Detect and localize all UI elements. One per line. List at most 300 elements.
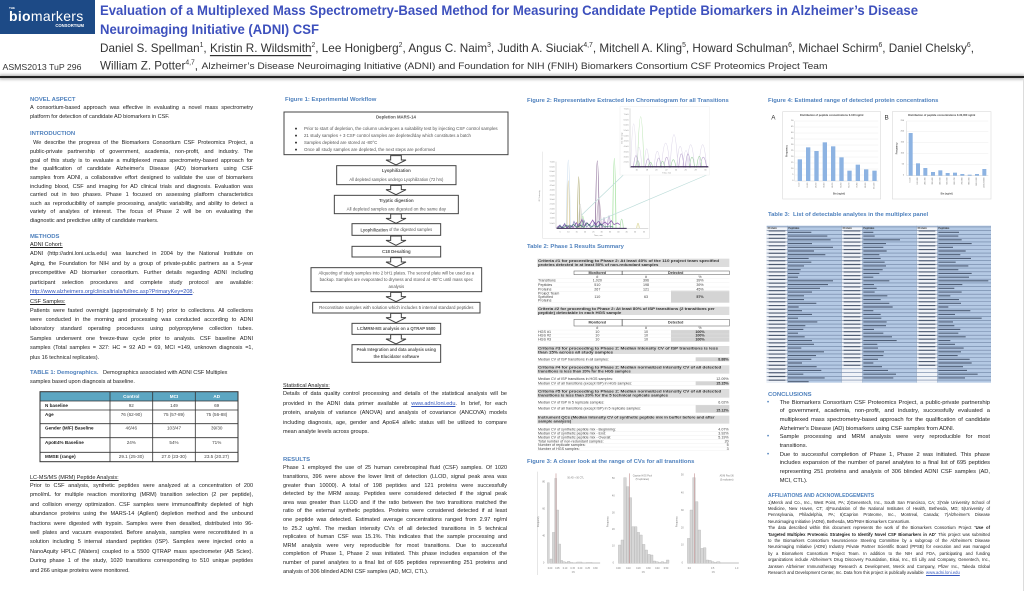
- table 2: phase 1 results summary: %: [698, 275, 702, 279]
- text: LC-MS/MS peptide analysis: [30, 483, 254, 574]
- text: results: ratio of the external synthetic peptides. Proteins were considered detected if at least: [283, 508, 507, 514]
- step: reconstitute: Reconstitute samples with solution which includes 5 internal standard peptides: [319, 305, 474, 310]
- chart B: 250: [901, 120, 905, 122]
- chart B: 600-700: [954, 176, 956, 185]
- text: LC-MS/MS peptide analysis: abundance proteins using the MARS-14 (Agilent) depletion method and the unbound: [30, 511, 253, 517]
- arrow 6: [386, 292, 406, 302]
- text: CSF samples: Samples underwent one freeze-thaw cycle prior to analysis. CSF baseline ADNI: [30, 336, 253, 342]
- arrow 4: [386, 236, 406, 245]
- table 2: phase 1 results summary: Median CV of all transitions (except ISP) in 5 replicate samples:: [538, 407, 641, 411]
- histogram: 50 AD + 50 CTL: 80: [542, 481, 546, 483]
- table 1: demographics: MMSE (range): [45, 454, 76, 459]
- table 2: phase 1 results summary: 10: [644, 338, 648, 342]
- table 1: demographics: Age: [45, 412, 54, 417]
- table 1: demographics: 103/47: [167, 426, 181, 430]
- table 2: phase 1 results summary: Monitored: [588, 321, 606, 325]
- table 2: phase 1 results summary: Criteria #2 for proceeding to Phase 2: At least 80% of ISP transitions (2 transitions per: [538, 307, 715, 311]
- inset chromatogram: 6.5e5: [624, 119, 630, 121]
- text: affiliations and acknowledgements: organizations include Alzheimer's Drug Discovery Foundation, Eisai, Inc., Eli Lilly and Company, Genentech, Inc.,: [768, 557, 990, 562]
- text: results: number of panel analytes to a final list of 695 peptides representing 251 proteins and: [283, 560, 507, 566]
- main chromatogram: Time, min: [594, 235, 603, 237]
- histogram: 50 AD + 50 CTL: 0.15: [570, 568, 576, 570]
- table 2: phase 1 results summary: sample analysis): [538, 420, 572, 424]
- chart B: 100-200: [917, 176, 919, 185]
- table 2: phase 1 results summary: Detected: [668, 321, 683, 325]
- title: [100, 3, 918, 38]
- chart B: 50: [902, 164, 905, 166]
- table 2: phase 1 results summary: Median CV of ISP transitions in HGS samples:: [538, 377, 613, 381]
- table 2: phase 1 results summary: #: [645, 275, 648, 279]
- step: depletion: Samples depleted are stored at -80°C: [304, 140, 377, 145]
- step: depletion: Prior to start of depletion, the column undergoes a suitability test by injecting CSF control samples: [304, 126, 498, 131]
- chart A: 0: [792, 180, 794, 182]
- table 1: demographics: 39/30: [211, 426, 223, 430]
- text: CSF samples: plus 16 technical replicates).: [30, 355, 99, 361]
- chart B: 150: [901, 142, 905, 144]
- main chromatogram: 6.5e6: [550, 166, 556, 168]
- text: results: analysis of 306 blinded ADNI CSF samples (AD, MCI, CTL).: [283, 569, 428, 575]
- logo: biomarkers consortium: CONSORTIUM: [55, 22, 84, 28]
- authors: ,: [203, 41, 210, 55]
- chart A: 45: [791, 126, 794, 128]
- authors: ,: [971, 41, 974, 55]
- figure 2: extracted ion chromatogram: [538, 106, 710, 238]
- text: statistical analysis: Details of data quality control processing and details of the statistical analysis will be: [283, 391, 507, 397]
- text: LC-MS/MS peptide analysis: pmol/mL for multiple reaction monitoring (MRM) transition selection (2 per peptide),: [30, 492, 253, 498]
- step: lyophilization: [337, 166, 456, 185]
- table 3: detectable analytes: Peptides: [788, 226, 800, 230]
- chart A: 5: [792, 174, 794, 176]
- step: aliquoting: analysis: [389, 284, 404, 289]
- authors: 5: [682, 42, 686, 48]
- text: novel aspect: platform for detection of candidate AD biomarkers in CSF.: [30, 114, 170, 120]
- chart B: 800-900: [969, 176, 971, 185]
- authors: 1: [200, 42, 204, 48]
- text: LC-MS/MS peptide analysis: Prior to CSF analysis, synthetic peptides were analyzed at a concentration of 200: [30, 483, 253, 489]
- heading: results: RESULTS: [283, 457, 310, 463]
- logo: biomarkers consortium: biomarkers: [9, 8, 84, 24]
- table 2: phase 1 results summary: Transitions: [538, 279, 556, 283]
- text: conclusions: transitions.: [780, 443, 807, 449]
- table 2: phase 1 results summary: #: [596, 275, 599, 279]
- chart A: 40: [791, 132, 794, 134]
- inset chromatogram: 5.0e5: [624, 135, 630, 137]
- heading: novel aspect: NOVEL ASPECT: [30, 97, 76, 103]
- step: aliquoting: backup. Samples are evaporated to dryness and stored at -80°C until mass spec: [320, 277, 474, 282]
- table 1: demographics: 29.1 (25-30): [119, 454, 144, 459]
- chart B: 100: [901, 153, 905, 155]
- label B: B: [885, 114, 889, 122]
- text: ADNI cohort: http://www.alzheimers.org/clinicaltrials/fullrec.asp?PrimaryKey=208.: [30, 289, 194, 295]
- main chromatogram: 35: [609, 232, 612, 234]
- table 2: phase 1 results summary: Criteria #3 for proceeding to Phase 2: Median Intensity CV of ISP transitions is less: [538, 346, 718, 350]
- header rule: [0, 76, 1024, 78]
- chart B: Frequency: [897, 142, 899, 154]
- table 2: phase 1 results summary: transitions is less than 20% for the HGS samples: [538, 370, 631, 374]
- heading: table 3: Table 3: List of detectable analytes in the multiplex panel: [768, 212, 928, 218]
- table 1: demographics: 54%: [169, 440, 179, 445]
- text: introduction: carried out in two phases. Phase 1 focused on assessing platform characteristics: [30, 192, 253, 198]
- text: statistical analysis: including diagnosis, age, gender and ApoE4 allelic status will be utilized to compare: [283, 420, 507, 426]
- heading: introduction: INTRODUCTION: [30, 131, 75, 137]
- text: introduction: [30, 140, 254, 224]
- text: LC-MS/MS peptide analysis: and 266 unique proteins were monitored.: [30, 568, 130, 574]
- inset chromatogram: 4.0e5: [624, 146, 630, 148]
- text: ADNI cohort: [30, 251, 253, 295]
- table 1: demographics: 23.5 (20.27): [204, 454, 230, 459]
- table 2: phase 1 results summary: peptide) detectable in each HGS sample: [538, 311, 621, 315]
- authors: 4,7: [583, 42, 593, 48]
- authors: 6: [967, 42, 971, 48]
- chart A: 0-10: [799, 182, 801, 187]
- chart B: 400-500: [939, 176, 941, 185]
- text: results: area was greater than LLOD and if the ratio between the two transitions matched the: [283, 500, 507, 506]
- bullets: conclusions: •: [767, 434, 769, 440]
- step: tryptic digestion: [334, 195, 458, 214]
- table 2: phase 1 results summary: 121: [643, 287, 649, 291]
- subheading: CSF samples: CSF Samples:: [30, 299, 65, 305]
- table 2: phase 1 results summary: 100%: [695, 334, 705, 338]
- table 2: phase 1 results summary: Number of HGS samples:: [538, 447, 580, 451]
- text: novel aspect: [30, 105, 253, 120]
- histogram: 50 AD + 50 CTL: 40: [542, 536, 546, 538]
- bullets: conclusions: •: [767, 452, 769, 458]
- text: LC-MS/MS peptide analysis: solution including 5 internal standard peptides (ISP). Samples were injected onto a: [30, 539, 253, 545]
- table 2: phase 1 results summary: Criteria #4 for proceeding to Phase 2: Median normalized intensity CV of all detected: [538, 365, 721, 369]
- chart A: 50-60: [840, 182, 842, 188]
- histogram: ADNI pool: 30: [681, 510, 684, 512]
- histogram: Caprion HGS pool: Frequency: [606, 515, 609, 527]
- histogram: ADNI pool: 10: [681, 545, 684, 547]
- text: results: detected by the MRM assay. Peptides were considered detected if the signal peak: [283, 491, 507, 497]
- chart A: 20: [791, 156, 794, 158]
- main chromatogram: 5: [559, 232, 561, 234]
- text: results: [283, 465, 507, 575]
- inset chromatogram: 6.0e5: [624, 125, 630, 127]
- table 2: phase 1 results summary: Monitored: [588, 271, 606, 275]
- bullets: conclusions: [767, 400, 769, 458]
- table 2: phase 1 results summary: Total number of non-redundant samples:: [538, 439, 604, 443]
- authors: [100, 41, 974, 72]
- table 2: phase 1 results summary: Median CV of synthetic peptide mix - Overall:: [538, 435, 611, 439]
- histogram: ADNI pool: [675, 473, 739, 574]
- chart B: 0-100: [910, 176, 912, 182]
- main chromatogram: 1.0e6: [550, 218, 556, 220]
- main chromatogram: 20: [584, 232, 587, 234]
- authors: ,: [195, 58, 198, 72]
- text: introduction: public-private partnership of government, academia, non-profit, and industry. The: [30, 149, 253, 155]
- caption: table 1: [30, 370, 228, 385]
- subheading: ADNI cohort: ADNI Cohort:: [30, 242, 63, 248]
- histogram: 50 AD + 50 CTL: 60: [542, 508, 546, 510]
- chart A: 15: [791, 162, 794, 164]
- caption: table 1: samples based upon diagnosis at baseline.: [30, 379, 135, 385]
- authors: , Angus C. Naim: [402, 41, 487, 55]
- table 2: phase 1 results summary: Peptides: [538, 283, 552, 287]
- label A: A: [771, 114, 776, 122]
- table 1: demographics: 75 (56-88): [206, 412, 228, 417]
- step: reconstitute: [313, 302, 480, 313]
- text: statistical analysis: protein, analysis of variance (ANOVA) and analysis of covariance (ANCOVA) models: [283, 410, 507, 416]
- authors: 3: [487, 42, 491, 48]
- text: conclusions: representing 251 proteins and analysis of 306 blinded ADNI CSF samples (AD,: [780, 469, 990, 475]
- arrow 7: [386, 313, 406, 323]
- histogram: Caprion HGS pool: 20: [612, 529, 615, 531]
- text: affiliations and acknowledgements: 1)Merck and Co., Inc., West Point, PA; 2)Genentech, Inc., South San Francisco, CA; 3)Yale University School of: [768, 500, 990, 504]
- histogram: 50 AD + 50 CTL: 0: [543, 562, 545, 564]
- chart A: 30: [791, 144, 794, 146]
- table 2: phase 1 results summary: Instrument QCs (Median Intensity CV of synthetic peptide mix in buffer before and after: [538, 416, 715, 420]
- main chromatogram: 55: [643, 232, 646, 234]
- histogram: 50 AD + 50 CTL: 50 AD + 50 CTL: [567, 476, 585, 479]
- table 2: phase 1 results summary: 15.15%: [716, 381, 729, 385]
- main chromatogram: 40: [617, 232, 620, 234]
- histogram: 50 AD + 50 CTL: [537, 473, 600, 574]
- step: lyophilization: Lyophilization: [382, 168, 411, 173]
- authors: , Mitchell A. Kling: [593, 41, 682, 55]
- inset chromatogram: 7.0e5: [624, 114, 630, 116]
- table 2: phase 1 results summary: 6.02%: [718, 401, 729, 405]
- chart B: [892, 112, 991, 199]
- heading: figure 1: Figure 1: Experimental Workflow: [285, 97, 376, 103]
- step: tryptic digestion: Tryptic digestion: [379, 198, 414, 203]
- table 2: phase 1 results summary: Median CV of all transitions (except ISP) in HGS samples:: [538, 381, 632, 385]
- table 2: phase 1 results summary: #: [645, 326, 648, 330]
- step: C18 desalting: [352, 246, 441, 257]
- step: lyophilization of digested samples: Lyophilization of the digested samples: [360, 227, 432, 232]
- caption: table 1: TABLE 1: Demographics. Demographics associated with ADNI CSF Multiplex: [30, 370, 227, 376]
- authors: 6: [788, 42, 792, 48]
- histogram: Caprion HGS pool: (5 replicates): [636, 478, 649, 481]
- main chromatogram: 30: [601, 232, 604, 234]
- histogram: ADNI pool: 0: [682, 562, 684, 564]
- chart A: 40-50: [832, 182, 834, 188]
- authors: , Judith A. Siuciak: [491, 41, 584, 55]
- table 2: phase 1 results summary: 39%: [696, 279, 704, 283]
- text: ADNI cohort: precompetitive AD biomarker consortium. Further details regarding ADNI including: [30, 270, 253, 276]
- histogram: Caprion HGS pool: 0: [613, 562, 615, 564]
- table 1: demographics: Gender (M/F) Baseline: [45, 426, 94, 430]
- main chromatogram: 5.0e5: [550, 223, 556, 225]
- table 1: demographics: [40, 391, 238, 462]
- text: CSF samples: samples (Total samples = 327: HC = 92 AD = 69, MCI =149, unknown diagnosis =1,: [30, 345, 253, 351]
- table 1: demographics: AD: [213, 394, 221, 399]
- histogram: 50 AD + 50 CTL: Frequency: [537, 515, 540, 527]
- inset chromatogram: 3.0e5: [624, 157, 630, 159]
- text: results: MRM analysis were very reproducible for most transitions. Due to successful: [283, 543, 507, 549]
- inset chromatogram: 5.5e5: [624, 130, 630, 132]
- table 2: phase 1 results summary: 45%: [696, 287, 704, 291]
- text: results: transitions, 396 were above the lower limit of detection (LLOD, signal peak area was: [283, 474, 507, 480]
- subheading: statistical analysis: Statistical Analysis:: [283, 383, 330, 389]
- table 2: phase 1 results summary: Criteria #1 for proceeding to Phase 2: At least 40% of the 110 project team specified: [538, 259, 719, 263]
- main chromatogram: [538, 152, 649, 238]
- table 2: phase 1 results summary: Number of replicate samples:: [538, 443, 586, 447]
- table 2: phase 1 results summary: 396: [643, 279, 649, 283]
- authors: 6: [878, 42, 882, 48]
- text: results: one peptide was detected. Estimated average concentrations ranged from 2.97 ng/ml: [283, 517, 507, 523]
- heading: methods: METHODS: [30, 234, 59, 240]
- histogram: 50 AD + 50 CTL: 0.10: [563, 568, 568, 570]
- table 2: phase 1 results summary: HGS #1: [538, 330, 551, 334]
- table 2: phase 1 results summary: 10: [595, 330, 599, 334]
- main chromatogram: 4.5e6: [550, 185, 556, 187]
- logo: biomarkers consortium: [0, 0, 95, 34]
- table 2: phase 1 results summary: Median CV of synthetic peptide mix - End:: [538, 431, 606, 435]
- histogram: ADNI pool: ADNI Pool 36: [720, 475, 734, 478]
- table 2: phase 1 results summary: %: [698, 326, 702, 330]
- chart A: 35: [791, 138, 794, 140]
- text: results: greater than 10000). A total of 198 peptides and 121 proteins were successfully: [283, 483, 507, 489]
- histogram: Caprion HGS pool: 30: [612, 512, 615, 514]
- arrow 1: [386, 156, 406, 165]
- table 1: demographics: Control: [123, 394, 139, 399]
- text: introduction: samples from ADNI, a collaborative effort designed to validate the use of biomarkers: [30, 175, 253, 181]
- chart B: Distribution of peptide concentrations 0-30,000 ng/ml: [908, 113, 976, 117]
- step: depletion: Once all study samples are depleted, the next steps are performed: [304, 147, 436, 152]
- histogram: 50 AD + 50 CTL: 0.05: [555, 568, 560, 570]
- histogram: 50 AD + 50 CTL: 0.25: [585, 568, 591, 570]
- text: affiliations and acknowledgements: to the Biomarkers Consortium Neuroscience Steering Committee by a subgroup of the Alzheimer's Disease: [768, 538, 990, 543]
- text: statistical analysis: mean analyte levels across groups.: [283, 429, 369, 435]
- table 2: phase 1 results summary: 57%: [696, 295, 704, 299]
- heading: affiliations: AFFILIATIONS AND ACKNOWLEDGEMENTS: [768, 493, 874, 499]
- table 1: demographics: 149: [170, 403, 178, 408]
- zoom connector lines: [582, 175, 707, 222]
- table 1: demographics: 71%: [212, 440, 221, 445]
- chart A: 50: [791, 120, 794, 122]
- table 2: phase 1 results summary: Median CV of ISP transitions in all samples:: [538, 357, 609, 361]
- text: introduction: goal of this study is to evaluate a multiplexed mass spectrometry-based approach for: [30, 158, 253, 164]
- table 2: phase 1 results summary: 10: [644, 330, 648, 334]
- table 2: phase 1 results summary: #: [596, 326, 599, 330]
- inset chromatogram: 26: [685, 169, 688, 171]
- main chromatogram: 50: [634, 232, 637, 234]
- arrow 3: [386, 214, 406, 223]
- table 3: detectable analytes: Protein: [843, 226, 852, 230]
- main chromatogram: 15: [576, 232, 579, 234]
- chart A: Distribution of peptide concentrations 0-100 ng/ml: [800, 113, 864, 117]
- chart B: 1000-30000: [983, 176, 985, 188]
- step: peak integration: the Elucidator software: [374, 354, 420, 359]
- inset chromatogram: 30: [704, 169, 707, 171]
- histogram: ADNI pool: CV: [712, 572, 715, 574]
- table 2: phase 1 results summary: 63: [644, 295, 648, 299]
- table 2: phase 1 results summary: 4.07%: [718, 427, 729, 431]
- text: results: to 25.2 ug/ml. The median intensity CVs of all detected transitions in 5 technical: [283, 526, 507, 532]
- histogram: Caprion HGS pool: Caprion HGS Pool: [633, 474, 652, 477]
- histogram: ADNI pool: Frequency: [675, 515, 678, 527]
- table 2: phase 1 results summary: 110: [594, 295, 600, 299]
- text: conclusions: [780, 400, 990, 484]
- histogram: ADNI pool: 50: [681, 475, 684, 477]
- inset chromatogram: 3.5e5: [624, 151, 630, 153]
- table 3: detectable analytes: Peptides: [863, 226, 875, 230]
- chart B: 900-1000: [976, 176, 978, 186]
- chart A: 10-20: [807, 182, 809, 188]
- authors: 4,7: [185, 59, 195, 66]
- title: Neuroimaging Initiative (ADNI) CSF: [100, 22, 319, 38]
- table 2: phase 1 results summary: [537, 258, 730, 451]
- inset chromatogram: 20: [655, 169, 658, 171]
- table 2: phase 1 results summary: 10: [595, 338, 599, 342]
- chart B: 200-300: [924, 176, 926, 185]
- arrow 5: [386, 258, 406, 267]
- authors: , Michael Schirm: [792, 41, 878, 55]
- table 3: detectable analytes: Peptides: [938, 226, 950, 230]
- step: peak integration: [352, 345, 441, 362]
- inset chromatogram: 2.5e5: [624, 162, 630, 164]
- text: introduction: including blood, CSF and imaging for AD clinical trials and diagnosis. Evaluation was: [30, 184, 253, 190]
- table 2: phase 1 results summary: Proteins: [538, 287, 552, 291]
- inset chromatogram: [620, 107, 709, 175]
- table 3: detectable analytes: Protein: [768, 226, 777, 230]
- authors: 2: [311, 42, 315, 48]
- histogram: Caprion HGS pool: 0.10: [626, 568, 631, 570]
- table 3: detectable analytes: Protein: [918, 226, 927, 230]
- text: CSF samples: were conducted in the morning and processing was conducted according to ADNI: [30, 317, 253, 323]
- table 2: phase 1 results summary: 10: [595, 334, 599, 338]
- table 2: phase 1 results summary: 100%: [695, 330, 705, 334]
- main chromatogram: 5.0e6: [550, 180, 556, 182]
- chart A: 30-40: [824, 182, 826, 188]
- main chromatogram: 4.0e6: [550, 190, 556, 192]
- table 2: phase 1 results summary: Project Team: [538, 291, 559, 295]
- text: ADNI cohort: Aging, the Foundation for NIH and by a group of private-public partners as a 5-year: [30, 261, 253, 267]
- arrow 8: [386, 335, 406, 344]
- main chromatogram: 1.5e6: [550, 213, 556, 215]
- table 1: demographics: N baseline: [45, 403, 68, 408]
- text: conclusions: Alzheimer's Disease (AD) biomarkers using CSF samples from ADNI.: [780, 426, 954, 432]
- table 2: phase 1 results summary: Median CV of ISP in 5 replicate samples:: [538, 401, 604, 405]
- table 1: demographics: 92: [129, 403, 134, 408]
- histogram: Caprion HGS pool: 0.00: [616, 568, 621, 570]
- table 2: phase 1 results summary: 3: [727, 447, 729, 451]
- table 2: phase 1 results summary: proteins detected in at least 50% of non-redundant samples: [538, 263, 658, 267]
- table 2: phase 1 results summary: 10: [644, 334, 648, 338]
- text: conclusions: of government, academia, non-profit, and industry, successfully evaluated a: [780, 408, 990, 414]
- text: affiliations and acknowledgements: [768, 500, 990, 576]
- table 2: phase 1 results summary: 12.09%: [716, 377, 729, 381]
- step: LC/MRM-MS: LC/MRM-MS analysis on a QTRAP 5500: [357, 326, 436, 331]
- inset chromatogram: 28: [695, 169, 698, 171]
- main chromatogram: 2.0e6: [550, 208, 556, 210]
- text: affiliations and acknowledgements: Research and Development Center, Inc. Data from this project is publically available www.adni.loni.edu: [768, 570, 960, 575]
- step: lyophilization: All depleted samples undergo Lyophilization (72 hrs): [349, 177, 444, 182]
- text: affiliations and acknowledgements: Janssen Alzheimer Immunotherapy Research & Development, Merck and Company, Pfizer Inc., Takeda Global: [768, 564, 990, 569]
- chart A: Bin (ng/ml): [833, 194, 845, 196]
- histogram: ADNI pool: (5 replicates): [720, 478, 734, 481]
- inset chromatogram: 24: [675, 169, 678, 171]
- table 2: phase 1 results summary: HGS #2: [538, 334, 551, 338]
- step: peak integration: Peak Integration and data analysis using: [357, 347, 436, 352]
- figure 3: CV histograms: [537, 472, 739, 575]
- text: CSF samples: Patients were fasted overnight (approximately 8 hr) prior to collections. All collections: [30, 308, 253, 314]
- text: affiliations and acknowledgements: Targeted Multiplex Proteomic Strategies to Identify Novel CSF Biomarkers in AD" This project was submitted: [768, 532, 990, 537]
- text: LC-MS/MS peptide analysis: and collision energy optimization. CSF samples were immunoaffinity depleted of high: [30, 502, 253, 508]
- chart B: 300-400: [932, 176, 934, 185]
- inset chromatogram: 22: [665, 169, 668, 171]
- step: depletion: 21 study samples + 3 CSF control samples are depleted/day which constitutes a batch: [304, 133, 472, 138]
- main chromatogram: XIC Intensity: [538, 190, 541, 202]
- step: depletion: [284, 112, 508, 155]
- text: LC-MS/MS peptide analysis: During phase 1 of the study, 1020 transitions corresponding to 510 unique peptides: [30, 558, 253, 564]
- main chromatogram: 5.5e6: [550, 176, 556, 178]
- figure 4: concentration bar charts: [771, 111, 992, 200]
- chart A: 20-30: [815, 182, 817, 188]
- table 1: demographics: 75 (57-89): [163, 412, 185, 417]
- text: LC-MS/MS peptide analysis: NanoAquity HPLC (Waters) coupled to a 5500 QTRAP mass spectrometer (AB Sciex).: [30, 549, 253, 555]
